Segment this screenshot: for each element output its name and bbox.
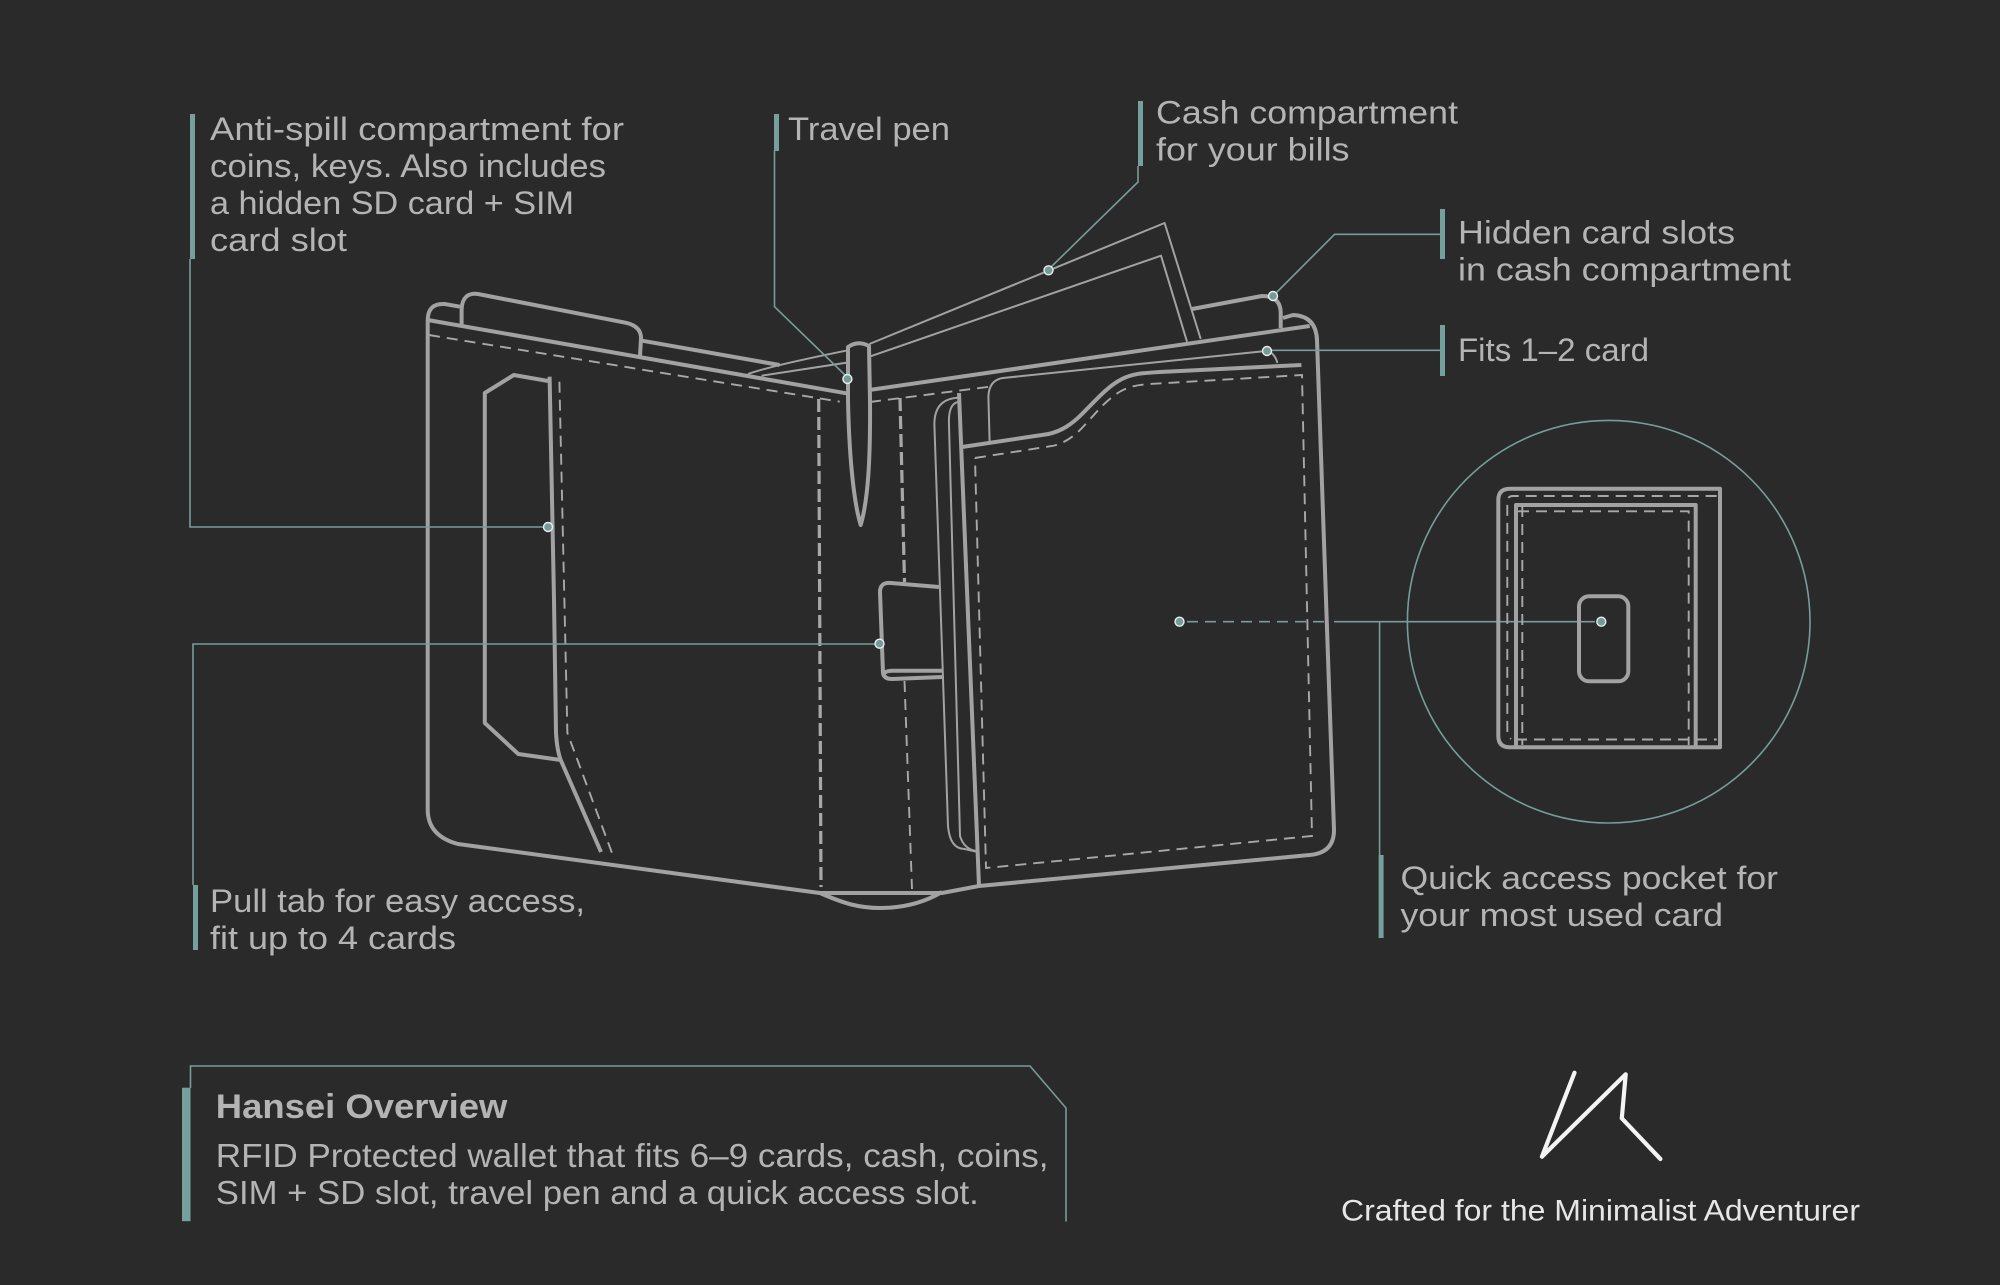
callout: anti-spill compartment: card slot bbox=[210, 222, 347, 258]
callout: anti-spill compartment bbox=[190, 111, 624, 259]
callout: quick access pocket: Quick access pocket for bbox=[1400, 860, 1778, 896]
leader: quick access pocket bbox=[1175, 617, 1595, 855]
anti-spill compartment bbox=[485, 375, 612, 853]
centre stitching bbox=[819, 398, 912, 889]
callout: anti-spill compartment: coins, keys. Also includes bbox=[210, 148, 606, 184]
cash bills in compartment bbox=[748, 223, 1201, 376]
right top edge and hidden card tab bbox=[869, 296, 1310, 402]
mini wallet back view bbox=[1498, 489, 1720, 747]
callout: quick access pocket: your most used card bbox=[1400, 897, 1723, 933]
callout: fits 1-2 card: Fits 1–2 card bbox=[1458, 332, 1649, 368]
callout: hidden card slots bbox=[1440, 209, 1791, 288]
panel: Hansei overview bbox=[182, 1066, 1066, 1222]
travel pen bbox=[848, 343, 870, 525]
left panel outline and back card tab bbox=[428, 294, 846, 402]
pull tab bbox=[880, 583, 942, 679]
tagline: Crafted for the Minimalist Adventurer bbox=[1341, 1194, 1860, 1228]
leader: fits 1-2 card bbox=[1262, 346, 1440, 356]
callout: cash compartment: Cash compartment bbox=[1156, 94, 1458, 130]
callout: fits 1-2 card bbox=[1440, 325, 1649, 376]
card in front slot bbox=[988, 351, 1277, 442]
wallet outer outline bbox=[428, 315, 1334, 893]
callout: pull tab bbox=[193, 883, 585, 956]
mini quick access card bbox=[1579, 596, 1628, 681]
zoom circle: quick access detail bbox=[1407, 420, 1810, 823]
leader: hidden card slots bbox=[1268, 234, 1440, 300]
callout: quick access pocket bbox=[1379, 855, 1778, 938]
overview body text: RFID Protected wallet that fits 6–9 cards, cash, coins, bbox=[216, 1137, 1049, 1174]
brand logo mark bbox=[1542, 1073, 1660, 1159]
front quick access pocket bbox=[962, 365, 1312, 868]
overview heading: Hansei Overview bbox=[216, 1088, 508, 1126]
callout: anti-spill compartment: Anti-spill compartment for bbox=[210, 111, 624, 147]
callout: pull tab: fit up to 4 cards bbox=[210, 920, 456, 956]
callout: cash compartment: for your bills bbox=[1156, 132, 1350, 168]
card slot ribs and divider bbox=[934, 393, 979, 886]
leader: cash compartment bbox=[1044, 166, 1138, 275]
leader: travel pen bbox=[774, 150, 852, 384]
overview body text: SIM + SD slot, travel pen and a quick access slot. bbox=[216, 1174, 979, 1211]
callout: travel pen: Travel pen bbox=[788, 111, 950, 147]
callout dot bbox=[1597, 617, 1606, 626]
callout: hidden card slots: in cash compartment bbox=[1458, 252, 1791, 288]
callout: hidden card slots: Hidden card slots bbox=[1458, 214, 1735, 250]
leader: anti-spill bbox=[190, 259, 552, 532]
callout: pull tab: Pull tab for easy access, bbox=[210, 883, 585, 919]
callout: anti-spill compartment: a hidden SD card + SIM bbox=[210, 185, 574, 221]
callout: cash compartment bbox=[1138, 94, 1458, 168]
bottom spine arc bbox=[820, 892, 942, 908]
wallet illustration bbox=[428, 223, 1334, 908]
leader: pull tab bbox=[193, 639, 884, 885]
overview body text bbox=[216, 1137, 1049, 1211]
